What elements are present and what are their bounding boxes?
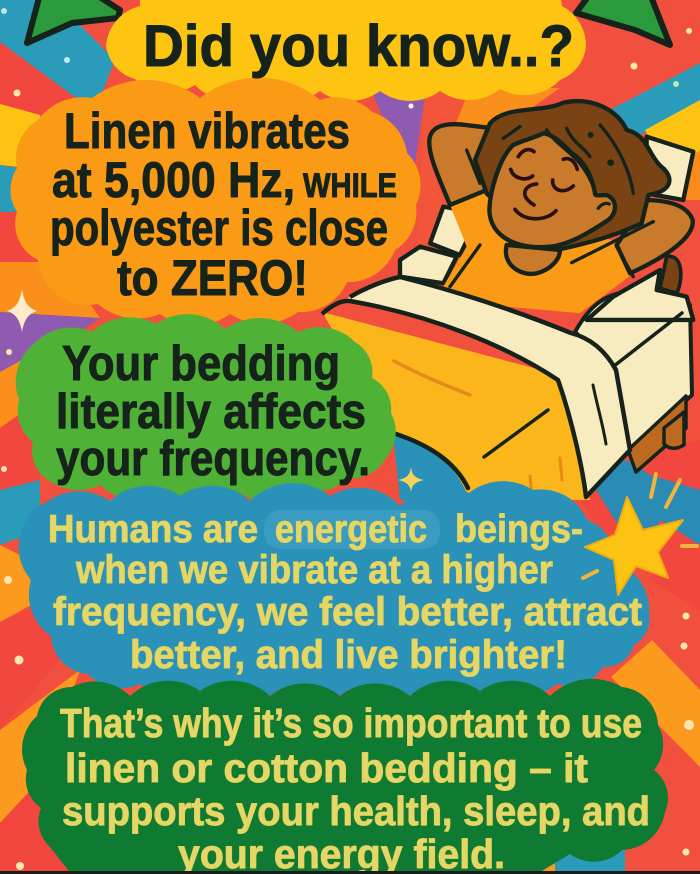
text block: why it matters: supports your health, sleep, and xyxy=(62,788,650,834)
text block: why it matters: linen or cotton bedding – it xyxy=(65,745,588,791)
text block: bedding: your frequency. xyxy=(56,432,370,486)
woman figure in zoom coordinates xyxy=(400,101,693,320)
bed leg xyxy=(664,412,684,448)
shirt xyxy=(443,193,633,313)
illustration: woman relaxing in bed xyxy=(322,101,693,500)
panel: yellow title cloud xyxy=(106,0,586,101)
icon: white sparkle xyxy=(7,289,37,332)
panel: green cloud xyxy=(16,314,396,504)
text block: humans: frequency, we feel better, attract xyxy=(53,590,642,634)
icon: yellow star xyxy=(585,497,683,595)
blanket bottom edge xyxy=(393,433,468,488)
bed detail lines xyxy=(394,313,682,498)
text block: humans: beings- xyxy=(455,508,583,551)
icon: right green leaf xyxy=(576,0,670,45)
panel: orange cloud xyxy=(10,78,421,325)
text block: bedding: literally affects xyxy=(56,385,366,439)
left arm xyxy=(429,124,493,205)
text block: humans: when we vibrate at a higher xyxy=(75,548,553,592)
neck xyxy=(506,245,560,274)
text block: linen fact: Linen vibrates xyxy=(64,103,350,159)
right arm xyxy=(617,200,693,273)
text block: linen fact: polyester is close xyxy=(50,200,388,256)
bed sheet and mattress xyxy=(575,290,692,452)
hair strands xyxy=(450,125,653,287)
face features xyxy=(511,150,577,219)
text block: linen fact xyxy=(50,103,397,306)
text block: linen fact: at 5,000 Hz, xyxy=(52,152,295,208)
text block: humans: Humans are xyxy=(48,508,258,551)
text block: humans: better, and live brighter! xyxy=(130,633,567,677)
text block: linen fact: WHILE xyxy=(303,167,397,205)
text block: bedding xyxy=(56,337,370,486)
bed base xyxy=(628,396,686,472)
pillows xyxy=(430,137,693,255)
bottom edge line xyxy=(0,871,700,874)
highlighted word backdrop xyxy=(264,510,440,549)
text block: bedding: Your bedding xyxy=(62,337,340,391)
text block: humans xyxy=(48,508,642,677)
star sparkle lines xyxy=(583,474,697,578)
text block: why it matters xyxy=(60,700,650,874)
ear detail xyxy=(598,203,609,208)
face xyxy=(489,133,615,247)
hair xyxy=(475,101,669,250)
blanket fold xyxy=(322,277,630,497)
pillow lower xyxy=(400,247,693,320)
panel: blue cloud xyxy=(19,481,650,700)
long hair behind right xyxy=(660,256,681,293)
icon: left green leaf xyxy=(27,0,120,43)
icon: yellow sparkle xyxy=(398,467,424,492)
title: Did you know..? xyxy=(143,14,574,79)
yellow blanket xyxy=(322,312,590,500)
text block: humans: energetic xyxy=(275,508,427,551)
panel: dark green cloud xyxy=(22,679,668,874)
text block: linen fact: to ZERO! xyxy=(117,250,308,306)
